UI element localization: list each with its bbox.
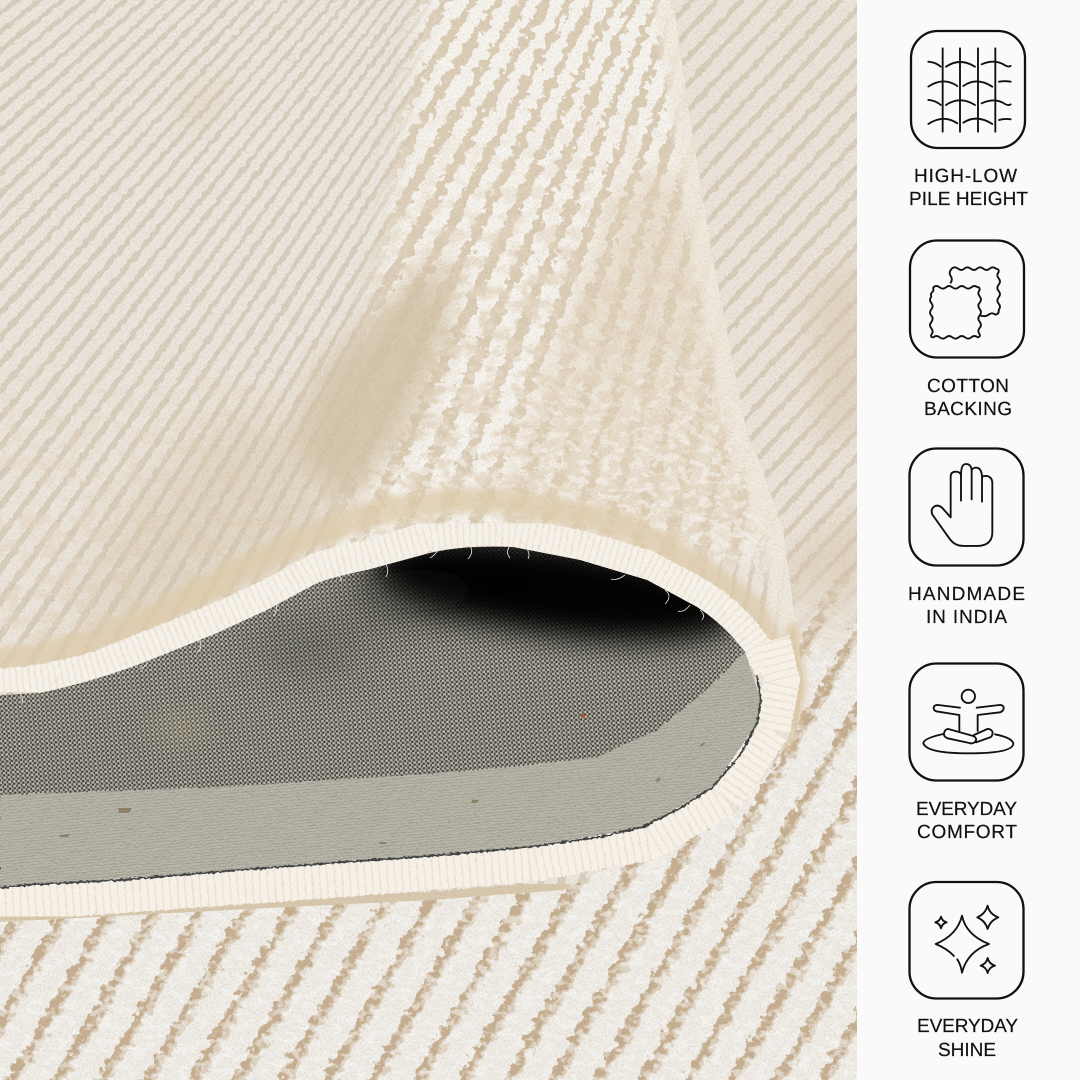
loose fibres along edge <box>20 545 704 703</box>
feature: everyday comfort: COMFORT <box>917 822 1017 843</box>
rug photograph <box>0 0 857 1080</box>
label: HIGH-LOW <box>914 166 1017 187</box>
side panel <box>857 0 1080 1080</box>
white rope edge, bottom <box>0 640 782 903</box>
grey binding tape <box>0 652 761 888</box>
tan binding shoulder around opening <box>0 500 800 745</box>
label: HANDMADE <box>908 584 1025 605</box>
label: COTTON <box>927 376 1009 397</box>
tan strip beneath bottom rope <box>0 886 570 918</box>
floor rug, lower stripes <box>0 560 870 1080</box>
rolled rug surface <box>0 0 803 922</box>
icon: sparkles <box>935 906 998 973</box>
bold stripes, right area <box>328 0 770 571</box>
icon: fabric swatches <box>930 267 1000 339</box>
feature: cotton backing <box>910 240 1024 420</box>
fold highlight along rug edge <box>668 0 792 660</box>
tan mottling, lower left <box>0 414 326 694</box>
feature: high-low pile height <box>909 31 1028 210</box>
feature: everyday shine <box>910 882 1024 1061</box>
dark woven backing <box>0 546 752 888</box>
label: EVERYDAY <box>916 799 1017 820</box>
fine pile stripes, left area <box>0 0 802 908</box>
wool grain <box>0 0 857 1080</box>
white rope edge, top <box>0 532 770 684</box>
icon: pile grid <box>928 48 1011 132</box>
icon: meditating figure <box>923 690 1013 753</box>
dark seam under tape <box>0 675 761 888</box>
rust speck on backing <box>581 714 585 718</box>
feature: everyday comfort <box>910 664 1024 843</box>
feature: high-low pile height: PILE HEIGHT <box>909 189 1028 210</box>
feature: handmade in india: IN INDIA <box>926 607 1007 628</box>
icon: hand <box>932 464 992 546</box>
label: EVERYDAY <box>917 1016 1018 1037</box>
tan patches on surface <box>60 75 450 640</box>
feature: cotton backing: BACKING <box>924 399 1012 420</box>
floor rug, right stripes <box>673 0 857 658</box>
feature: everyday shine: SHINE <box>938 1040 996 1061</box>
feature: handmade in india <box>908 448 1025 628</box>
